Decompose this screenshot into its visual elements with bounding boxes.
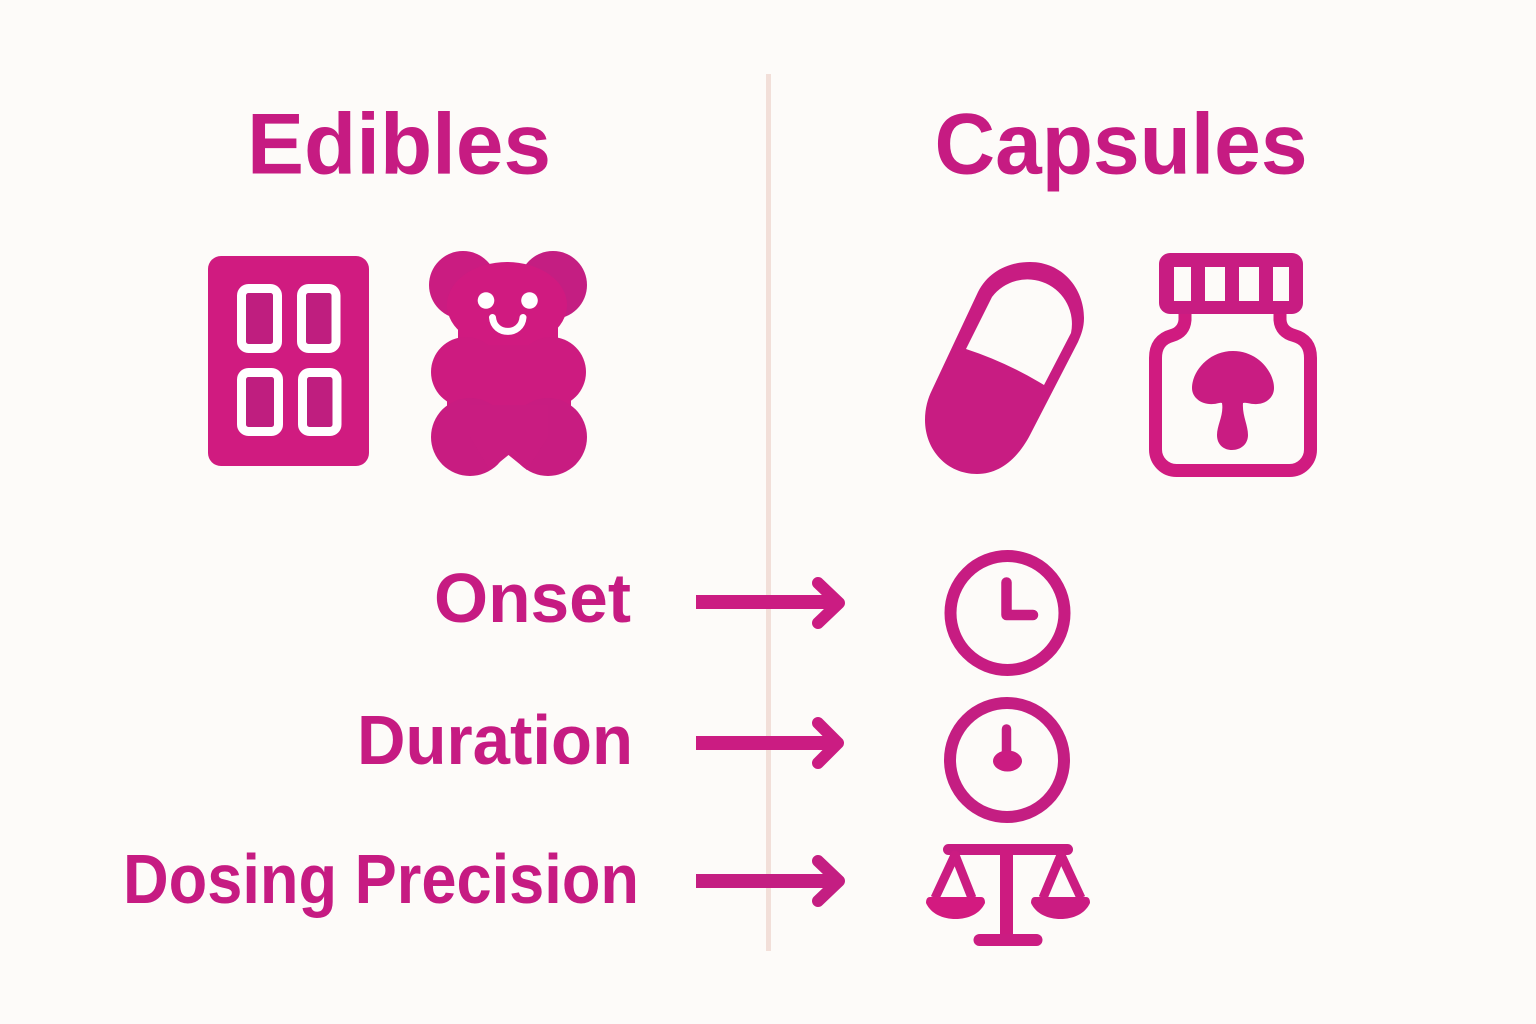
arrow: duration [696,723,838,763]
icon: capsule [925,262,1084,474]
label: Duration: Duration [357,701,633,779]
label: Onset: Onset [434,559,631,637]
heading: Capsules: Capsules [934,96,1308,192]
icon: gummy bear [429,251,587,476]
arrow: onset [696,583,839,623]
icon: balance scale [926,850,1090,940]
arrow: dosing precision [696,861,839,901]
icon: chocolate bar [208,256,369,466]
icon: timer [950,703,1064,817]
label: Dosing Precision: Dosing Precision [123,840,639,918]
icon: clock [950,556,1064,670]
icon: mushroom jar [1156,253,1310,470]
center divider [766,74,771,951]
heading: Edibles: Edibles [247,96,551,192]
